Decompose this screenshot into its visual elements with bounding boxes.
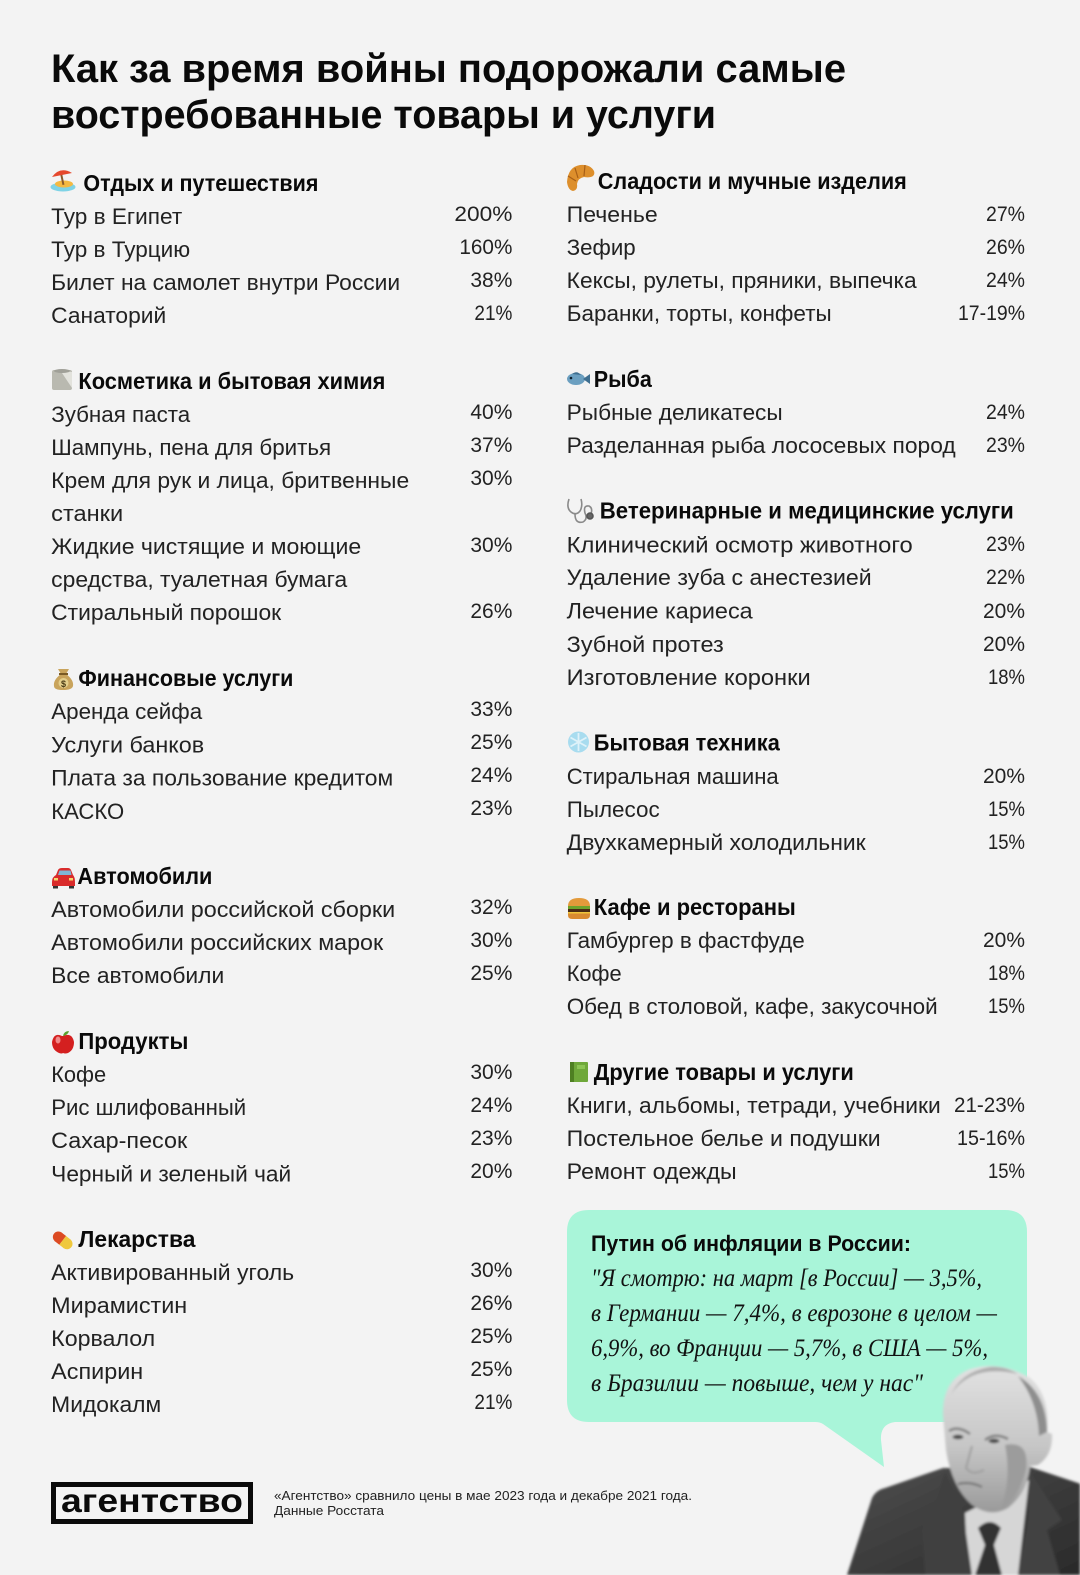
panel: sweets	[567, 165, 1025, 326]
row	[567, 598, 1025, 624]
heading: Ветеринарные и медицинские услуги	[600, 498, 1014, 524]
row	[51, 929, 512, 955]
title: Как за время войны подорожали самые	[51, 47, 846, 91]
row	[567, 830, 1025, 855]
row: Разделанная рыба лососевых пород	[567, 433, 956, 458]
row: 20%	[983, 929, 1025, 952]
row	[51, 1061, 512, 1087]
row: 26%	[986, 236, 1025, 259]
row	[51, 1259, 512, 1285]
row: 30%	[470, 1259, 512, 1282]
row: Корвалол	[51, 1326, 155, 1351]
row	[51, 1358, 512, 1384]
row: Удаление зуба с анестезией	[567, 565, 872, 590]
row: 17-19%	[958, 302, 1025, 325]
row: Печенье	[567, 202, 658, 227]
row: Все автомобили	[51, 963, 224, 988]
row: Услуги банков	[51, 732, 204, 758]
row: Черный и зеленый чай	[51, 1162, 291, 1186]
row: Ремонт одежды	[567, 1159, 737, 1184]
panel: travel	[50, 170, 512, 328]
row	[51, 467, 512, 526]
row	[51, 1325, 512, 1351]
row: 15%	[988, 798, 1025, 821]
heading: Финансовые услуги	[78, 665, 293, 691]
row: Стиральный порошок	[51, 600, 281, 625]
row: Обед в столовой, кафе, закусочной	[567, 994, 938, 1019]
row: 30%	[470, 929, 512, 952]
panel: groceries	[51, 1028, 512, 1186]
row	[51, 203, 512, 229]
row: Кексы, рулеты, пряники, выпечка	[567, 268, 917, 293]
footnote: Данные Росстата	[274, 1503, 385, 1518]
footnote	[274, 1488, 692, 1518]
row	[567, 961, 1025, 986]
panel: fish	[567, 366, 1025, 458]
panel: medicines	[51, 1226, 512, 1417]
row: 23%	[470, 1127, 512, 1150]
row: 15%	[988, 831, 1025, 854]
row: 20%	[983, 633, 1025, 656]
row	[51, 797, 512, 824]
row	[567, 928, 1025, 953]
quote text: в Германии — 7,4%, в еврозоне в целом —	[591, 1300, 998, 1327]
quote text	[591, 1265, 998, 1397]
row: Плата за пользование кредитом	[51, 766, 393, 790]
row: Зубная паста	[51, 402, 191, 427]
heading: Рыба	[594, 366, 652, 392]
icon: croissant	[567, 165, 594, 191]
row: 20%	[983, 600, 1025, 623]
row: 160%	[459, 236, 512, 259]
row: 32%	[470, 896, 512, 919]
row: 21%	[474, 302, 512, 325]
row	[51, 534, 512, 592]
row	[567, 301, 1025, 326]
row: 26%	[470, 1292, 512, 1315]
row: Автомобили российской сборки	[51, 897, 395, 922]
row: 24%	[986, 401, 1025, 424]
icon: green book	[570, 1062, 588, 1082]
speech bubble	[567, 1210, 1027, 1467]
row	[51, 434, 512, 460]
row: Кофе	[567, 961, 622, 986]
panel: other goods	[567, 1059, 1025, 1184]
heading: Сладости и мучные изделия	[598, 168, 907, 194]
quote text: в Бразилии — повыше, чем у нас"	[591, 1370, 923, 1397]
row: Книги, альбомы, тетради, учебники	[567, 1093, 941, 1118]
icon: stethoscope	[568, 499, 593, 522]
row: 200%	[454, 203, 512, 226]
row	[51, 1292, 512, 1318]
row: 21-23%	[954, 1094, 1025, 1117]
icon: pill	[51, 1229, 75, 1252]
heading: Кафе и рестораны	[594, 894, 796, 920]
row: 25%	[470, 962, 512, 985]
row: 30%	[470, 467, 512, 490]
row	[51, 236, 512, 262]
row: 18%	[988, 962, 1025, 985]
row: 21%	[474, 1391, 512, 1414]
row: Двухкамерный холодильник	[567, 830, 866, 855]
icon: car	[52, 868, 75, 888]
row	[567, 1159, 1025, 1184]
row: Сахар-песок	[51, 1128, 187, 1153]
row: 30%	[470, 1061, 512, 1084]
panel: cars	[51, 863, 512, 988]
icon: money bag: $	[61, 679, 66, 689]
row: Санаторий	[51, 303, 166, 328]
footnote: «Агентство» сравнило цены в мае 2023 года и декабре 2021 года.	[274, 1488, 692, 1503]
row	[567, 565, 1025, 590]
row: 15-16%	[957, 1127, 1025, 1150]
row: 15%	[988, 995, 1025, 1018]
icon: money bag	[54, 669, 73, 690]
row	[51, 731, 512, 758]
row: Тур в Турцию	[51, 237, 190, 262]
row: 20%	[470, 1160, 512, 1183]
row: Гамбургер в фастфуде	[567, 928, 805, 953]
row: Постельное белье и подушки	[567, 1126, 881, 1151]
row	[567, 632, 1025, 657]
row	[51, 962, 512, 988]
row: 18%	[988, 666, 1025, 689]
row: 26%	[470, 600, 512, 623]
row: Клинический осмотр животного	[567, 532, 913, 558]
icon: snowflake	[568, 732, 589, 752]
row: 22%	[986, 566, 1025, 589]
heading: Продукты	[78, 1028, 188, 1054]
row: 37%	[470, 434, 512, 457]
callout: Putin quote	[567, 1210, 1027, 1467]
quote heading: Путин об инфляции в России:	[591, 1231, 911, 1256]
logo: агентство	[61, 1482, 243, 1519]
icon: burger	[568, 898, 590, 919]
row: 40%	[470, 401, 512, 424]
row: Аспирин	[51, 1359, 143, 1384]
row	[567, 202, 1025, 227]
icon: fish	[567, 372, 590, 385]
row	[51, 896, 512, 922]
row: Рыбные деликатесы	[567, 400, 783, 425]
row	[51, 698, 512, 724]
row: Шампунь, пена для бритья	[51, 435, 331, 460]
row: Активированный уголь	[51, 1260, 294, 1285]
row: Автомобили российских марок	[51, 930, 383, 955]
row: 20%	[983, 765, 1025, 788]
photo: portrait	[847, 1366, 1080, 1575]
row	[567, 235, 1025, 260]
row	[567, 797, 1025, 822]
row	[567, 764, 1025, 789]
row: Аренда сейфа	[51, 699, 203, 724]
row: 30%	[470, 534, 512, 557]
panel: appliances	[567, 730, 1025, 855]
row: КАСКО	[51, 799, 124, 824]
row: Мирамистин	[51, 1293, 187, 1318]
row: 25%	[470, 1358, 512, 1381]
row	[51, 764, 512, 790]
heading: Другие товары и услуги	[594, 1059, 854, 1085]
panel: cosmetics	[51, 368, 512, 625]
row: Крем для рук и лица, бритвенные	[51, 468, 409, 493]
row	[51, 401, 512, 427]
panel: cafes	[567, 894, 1025, 1019]
row	[567, 400, 1025, 425]
row: 24%	[470, 764, 512, 787]
heading: Лекарства	[78, 1226, 196, 1252]
row: станки	[51, 501, 123, 526]
row: Кофе	[51, 1062, 106, 1087]
row: 25%	[470, 731, 512, 754]
row: Зефир	[567, 235, 636, 260]
row: Пылесос	[567, 797, 660, 822]
row: Лечение кариеса	[567, 598, 753, 624]
row: 33%	[470, 698, 512, 721]
quote text: 6,9%, во Франции — 5,7%, в США — 5%,	[591, 1335, 988, 1362]
row: Баранки, торты, конфеты	[567, 301, 832, 326]
row: средства, туалетная бумага	[51, 567, 348, 592]
row: Билет на самолет внутри России	[51, 270, 400, 295]
panel: vet and medical	[567, 498, 1025, 690]
row: Зубной протез	[567, 632, 724, 657]
row	[51, 302, 512, 328]
row	[51, 1094, 512, 1120]
row: Мидокалм	[51, 1392, 161, 1417]
row: 23%	[470, 797, 512, 820]
row: Тур в Египет	[51, 204, 182, 229]
row: Рис шлифованный	[51, 1095, 246, 1120]
row: Жидкие чистящие и моющие	[51, 534, 361, 559]
quote text: "Я смотрю: на март [в России] — 3,5%,	[591, 1265, 982, 1292]
icon: toilet paper	[52, 369, 72, 390]
row	[567, 665, 1025, 690]
row	[51, 1391, 512, 1417]
row: Изготовление коронки	[567, 665, 811, 690]
row: 23%	[986, 533, 1025, 556]
row: 24%	[986, 269, 1025, 292]
heading: Автомобили	[77, 863, 212, 889]
row	[567, 1126, 1025, 1151]
heading: Отдых и путешествия	[83, 170, 318, 196]
icon: beach umbrella	[50, 170, 76, 192]
row: Стиральная машина	[567, 764, 779, 789]
row	[51, 1127, 512, 1153]
row: 25%	[470, 1325, 512, 1348]
row: 23%	[986, 434, 1025, 457]
row: 38%	[470, 269, 512, 292]
row: 15%	[988, 1160, 1025, 1183]
row	[51, 600, 512, 625]
row	[51, 1160, 512, 1186]
icon: apple	[52, 1031, 74, 1054]
panel: finance	[51, 665, 512, 824]
row: 27%	[986, 203, 1025, 226]
title: востребованные товары и услуги	[51, 93, 716, 137]
heading: Косметика и бытовая химия	[78, 368, 385, 394]
heading: Бытовая техника	[594, 730, 780, 756]
title	[51, 47, 846, 137]
row: 24%	[470, 1094, 512, 1117]
